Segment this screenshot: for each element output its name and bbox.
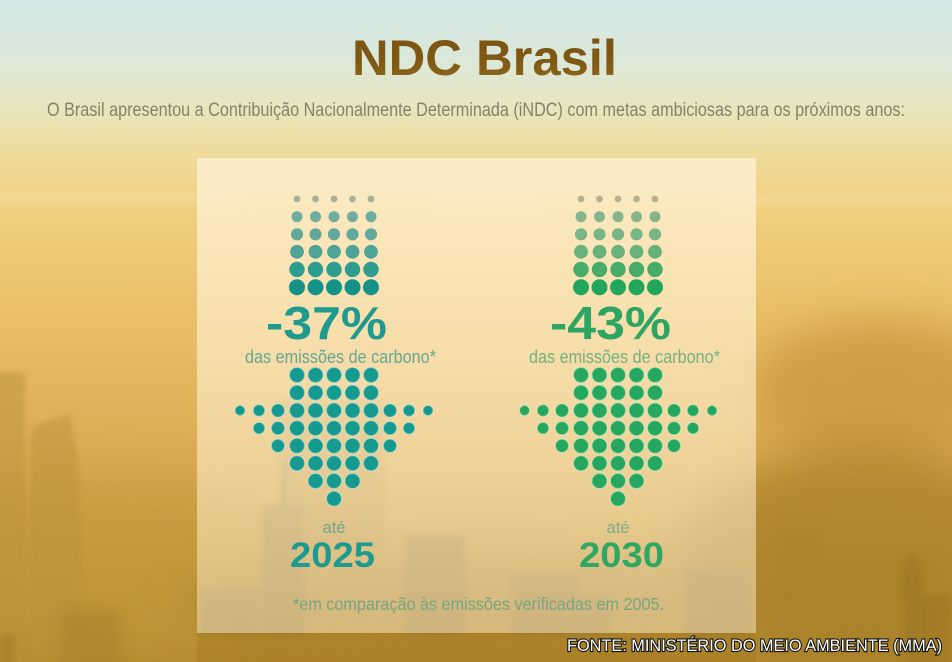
title: NDC Brasil [352,29,617,86]
label: até: até [606,518,630,537]
year: 2025: 2025 [290,536,375,575]
percentage: -43%: -43% [550,297,671,349]
band below the card [197,633,756,662]
icon: fading dot column, green [573,196,663,295]
column: 2030 target [519,196,720,575]
icon: dot arrow pointing down, green [519,367,717,506]
percentage: -37%: -37% [266,297,387,349]
caption: emissions: das emissões de carbono* [529,347,720,367]
panel: translucent card [197,158,756,633]
icon: fading dot column, teal [289,196,379,295]
source credit: FONTE: MINISTÉRIO DO MEIO AMBIENTE (MMA) [567,636,942,655]
label: até: até [322,518,346,537]
year: 2030: 2030 [579,536,664,575]
caption: emissions: das emissões de carbono* [245,347,436,367]
column: 2025 target [235,196,436,575]
icon: dot arrow pointing down, teal [235,367,433,506]
footnote: *em comparação às emissões verificadas em 2005. [293,594,664,614]
